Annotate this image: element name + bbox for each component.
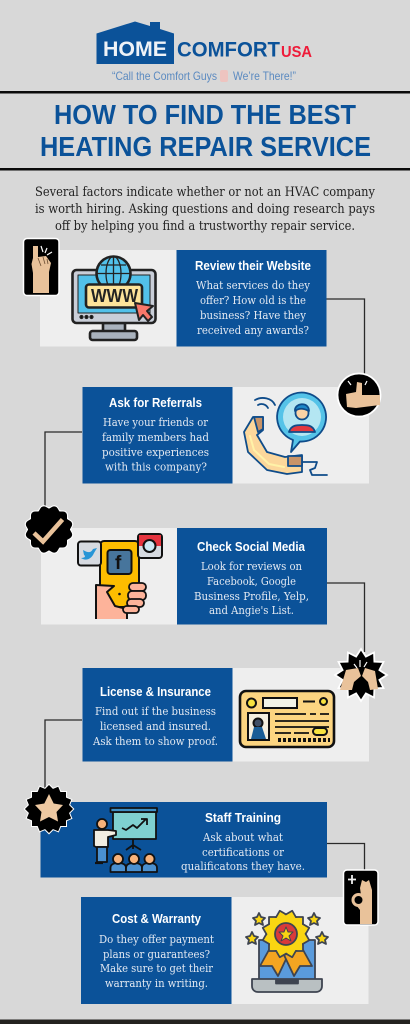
- body text: received any awards?: [197, 323, 309, 337]
- badge: star: [24, 784, 74, 834]
- body text: Find out if the business: [95, 704, 216, 718]
- body text: Ask about what: [202, 830, 283, 844]
- logo: [96, 22, 312, 83]
- tagline: “Call the Comfort Guys: [112, 69, 217, 83]
- body text: and Angie's List.: [209, 603, 294, 617]
- panel: ask for referrals: [82, 387, 369, 484]
- body text: [181, 830, 305, 873]
- body text: Do they offer payment: [99, 932, 214, 946]
- body text: certifications or: [202, 845, 284, 859]
- logo word: USA: USA: [281, 44, 312, 61]
- logo word: HOME: HOME: [103, 38, 167, 61]
- icon: monitor with www: [72, 256, 156, 340]
- body text: Have your friends or: [103, 415, 208, 429]
- body text: [92, 704, 218, 748]
- heading: Review their Website: [195, 259, 311, 273]
- intro text: off by helping you find a trustworthy repair service.: [55, 219, 355, 234]
- body text: with this company?: [105, 460, 207, 474]
- icon: award over laptop: [246, 911, 328, 992]
- icon: presenter and audience: [94, 808, 157, 872]
- body text: What services do they: [196, 278, 310, 292]
- body text: Business Profile, Yelp,: [194, 589, 309, 603]
- icon: ID card: [240, 691, 334, 747]
- logo word: COMFORT: COMFORT: [177, 38, 280, 62]
- heading: Ask for Referrals: [109, 396, 202, 410]
- title: HEATING REPAIR SERVICE: [40, 131, 371, 162]
- icon: house: [96, 22, 174, 64]
- heading: Check Social Media: [197, 540, 306, 554]
- heading: Staff Training: [205, 811, 281, 825]
- body text: [99, 932, 214, 990]
- intro text: is worth hiring. Asking questions and doing research pays: [35, 202, 375, 217]
- body text: [194, 559, 309, 617]
- icon: hand holding phone with social apps: f: [115, 553, 122, 574]
- body text: business? Have they: [200, 308, 306, 322]
- body text: [196, 278, 310, 337]
- body text: Ask them to show proof.: [92, 734, 218, 748]
- intro text: Several factors indicate whether or not an HVAC company: [35, 185, 376, 200]
- panel: cost and warranty: [81, 897, 368, 1004]
- body text: positive experiences: [102, 445, 209, 459]
- body text: qualificatons they have.: [181, 859, 305, 873]
- body text: Facebook, Google: [207, 574, 296, 588]
- intro text: [35, 185, 376, 234]
- body text: [102, 415, 210, 474]
- badge: thumbs up: [338, 374, 380, 416]
- connectors: [45, 299, 364, 872]
- tagline: [112, 69, 296, 83]
- panel: review their website: [40, 250, 326, 346]
- badge: OK hand: [344, 870, 378, 925]
- panel: check social media: [41, 528, 327, 624]
- body text: Look for reviews on: [201, 559, 303, 573]
- www label: WWW: [91, 286, 138, 306]
- heading: Cost & Warranty: [112, 912, 201, 926]
- badge: clapping hands: [335, 649, 387, 701]
- title: [40, 99, 371, 162]
- panel: staff training: [40, 802, 327, 878]
- body text: offer? How old is the: [200, 293, 306, 307]
- icon: hand holding phone with social apps: [78, 534, 162, 619]
- body text: warranty in writing.: [105, 976, 208, 990]
- badge: pointing finger: [24, 238, 59, 296]
- tagline: We’re There!”: [233, 69, 296, 83]
- body text: Make sure to get their: [100, 961, 213, 975]
- body text: family members had: [102, 430, 210, 444]
- footer bar: [0, 1020, 410, 1024]
- panel: license and insurance: [82, 668, 369, 762]
- title: HOW TO FIND THE BEST: [54, 99, 356, 130]
- body text: licensed and insured.: [100, 719, 211, 733]
- badge: check mark: [23, 504, 75, 555]
- body text: plans or guarantees?: [103, 947, 210, 961]
- heading: License & Insurance: [100, 685, 211, 699]
- icon: phone and contact bubble: [244, 393, 327, 475]
